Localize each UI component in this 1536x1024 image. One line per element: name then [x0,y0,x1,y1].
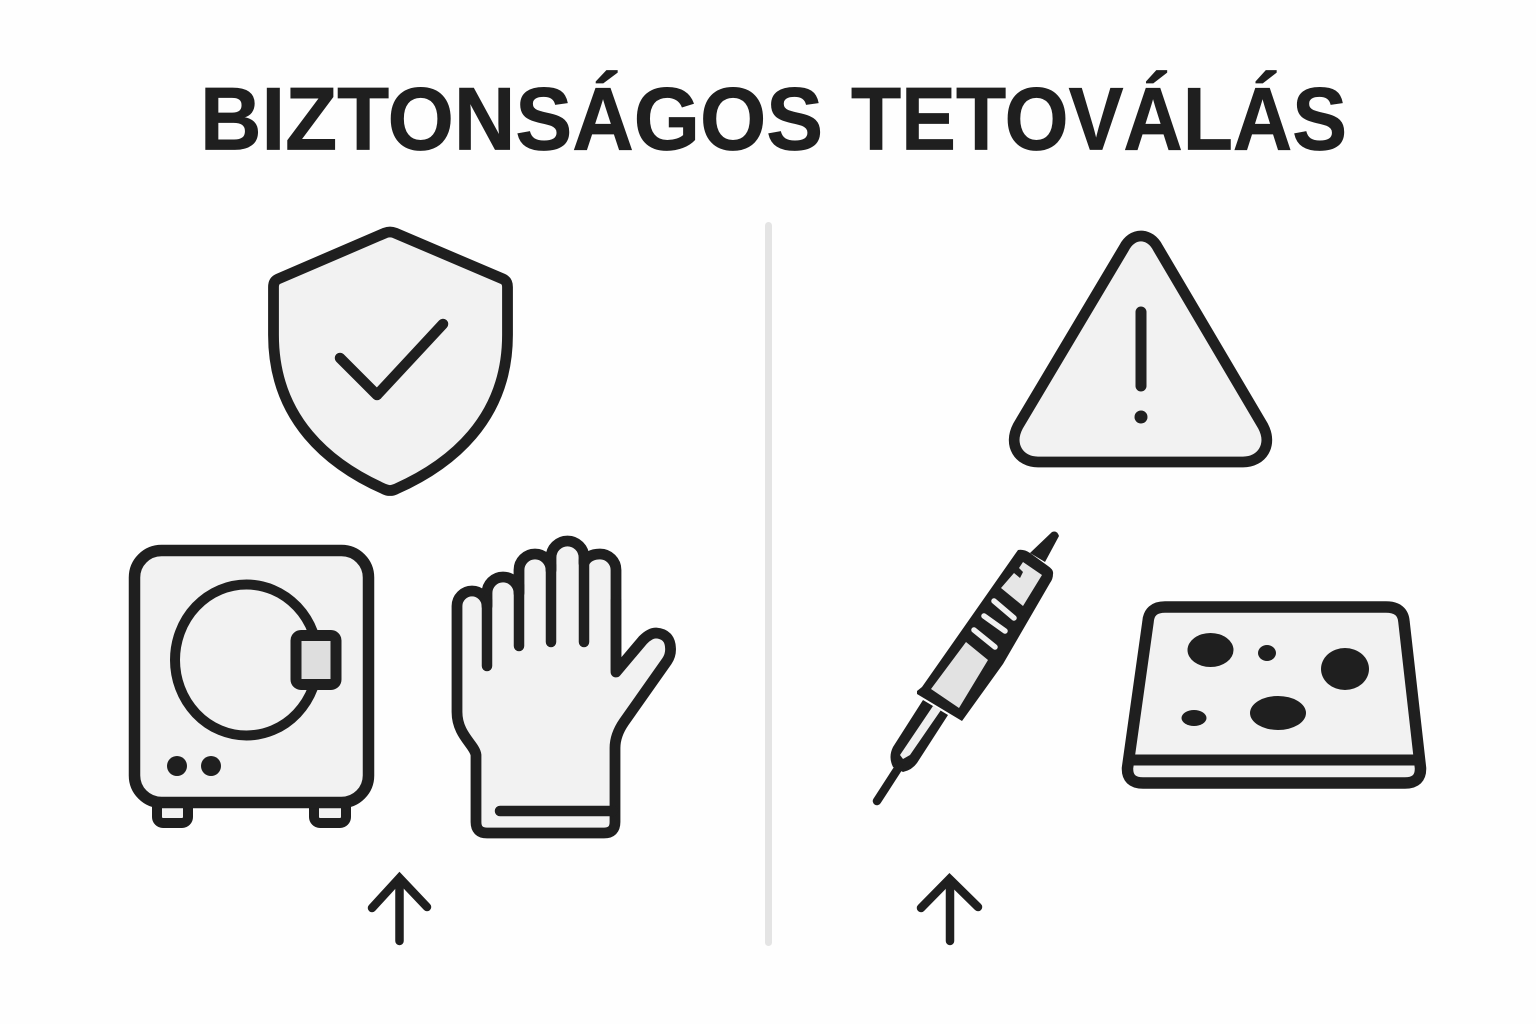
grip stripes [974,601,1014,647]
panel: risky side [877,236,1421,941]
panel: safe side [134,232,671,941]
sterilizer door [175,584,318,736]
title: BIZTONSÁGOS [200,68,823,168]
sterilizer feet [157,796,346,823]
icon: contaminated surface [1127,607,1421,783]
icon: protective glove [457,541,671,833]
lower window [931,642,988,708]
control buttons [167,756,221,776]
icon: shield with check mark [274,232,508,490]
pen tip [1030,532,1059,562]
icon: dirty tattoo pen [877,532,1059,801]
door handle [296,636,336,684]
title [200,68,1347,168]
contamination spots [1182,633,1369,730]
arrow: up right [921,879,978,941]
arrow: up left [372,878,427,941]
upper window [1001,562,1042,606]
sterilizer body [134,550,368,802]
neck window [900,706,941,759]
needle [877,767,899,801]
title: TETOVÁLÁS [851,68,1347,168]
pen barrel [917,550,1053,721]
pen neck [890,700,948,772]
icon: warning triangle [1014,236,1267,462]
icon: autoclave sterilizer [134,550,368,823]
